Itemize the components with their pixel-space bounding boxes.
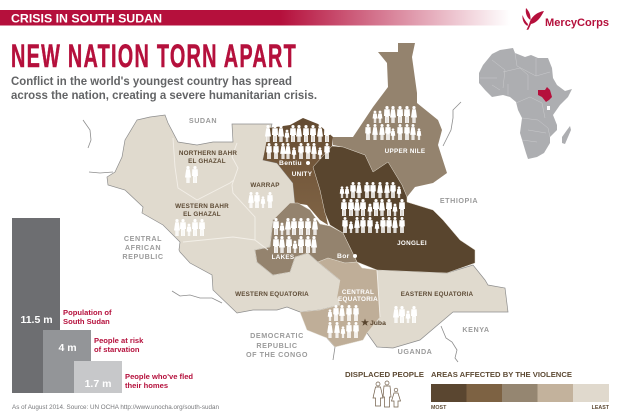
bar: 4m: 4 m [58,342,77,354]
legend: areas affected: LEAST [592,405,610,411]
city: Juba: Juba [370,320,386,327]
title: NEW NATION TORN APART [11,38,297,74]
city: Bentiu: Bentiu [279,160,302,167]
bar: 1.7m: 1.7 m [85,378,111,390]
people: Unity [265,125,330,159]
label: displaced: People who've fled [125,372,193,381]
South Sudan highlight [538,87,552,102]
locator map: Africa [479,48,572,159]
region labels: UPPER NILE [385,148,425,155]
label: starvation [94,336,144,354]
neighbouring country labels: REPUBLIC [122,252,164,261]
label: population: South Sudan [63,317,110,326]
neighbouring country labels: CENTRAL [124,234,162,243]
bar: 4m [43,330,91,393]
neighbouring country labels: OF THE CONGO [246,350,308,359]
region borders [173,138,380,317]
city: Juba [361,318,386,327]
region labels: LAKES [272,254,294,261]
region labels: EL GHAZAL [183,211,221,218]
bar: 11.5m: 11.5 m [20,314,53,326]
region labels: WARRAP [250,182,280,189]
region: Central Equatoria [300,258,380,347]
region labels: WESTERN BAHR [175,203,229,210]
region labels: NORTHERN BAHR [179,150,237,157]
neighbouring country labels: ETHIOPIA [440,196,478,205]
region labels: CENTRAL [342,289,374,296]
neighbouring country labels: KENYA [462,325,490,334]
subtitle [11,74,317,102]
people: Northern Bahr el Ghazal [185,166,198,183]
logo: Mercy Corps [522,8,609,30]
people: Warrap [248,192,273,208]
region labels: EASTERN EQUATORIA [401,291,473,298]
neighbouring country labels: REPUBLIC [256,341,298,350]
region labels: EQUATORIA [338,296,378,303]
subtitle: Conflict in the world's youngest country has spread [11,74,292,88]
people: Central Equatoria [327,305,359,338]
legend: displaced people: DISPLACED PEOPLE [345,370,424,379]
neighbouring country labels: AFRICAN [125,243,161,252]
neighbouring country labels [122,116,490,359]
map of South Sudan [107,43,508,348]
label: population: Population of [63,308,112,317]
people: Jonglei [340,182,405,233]
region: Lakes and Bor [255,203,357,275]
neighbouring country labels: DEMOCRATIC [250,331,304,340]
region: Upper Nile [333,43,447,197]
people: Lakes [273,218,318,253]
region labels: WESTERN EQUATORIA [235,291,309,298]
legend: areas affected [431,370,610,411]
region labels: EL GHAZAL [188,158,226,165]
label: starvation: People at risk [94,336,144,345]
source note: As of August 2014. Source: UN OCHA http://www.unocha.org/south-sudan [12,404,219,411]
subtitle: across the nation, creating a severe humanitarian crisis. [11,88,317,102]
region labels: JONGLEI [397,240,427,247]
label: starvation: of starvation [94,345,140,354]
people: Eastern Equatoria [393,306,417,323]
people: Upper Nile [365,106,421,140]
label: displaced [125,372,193,390]
header bar: CRISIS IN SOUTH SUDAN [11,13,162,25]
region labels: UNITY [292,171,313,178]
header bar [0,10,510,26]
region: Jonglei [313,146,475,273]
region labels [175,148,473,303]
label: population [63,308,112,326]
legend: areas affected: AREAS AFFECTED BY THE VIOLENCE [431,370,572,379]
city: Bor [337,253,357,260]
bar: 11.5m [12,218,60,393]
legend: areas affected: MOST [431,405,447,411]
region: Unity [263,118,333,225]
logo: Mercy Corps: MercyCorps [545,17,609,29]
neighbouring country labels: UGANDA [398,347,432,356]
neighbouring country labels: SUDAN [189,116,217,125]
region: Western and Northern Bahr el Ghazal, Warrap, Western and Eastern Equatoria base [107,115,508,348]
chart: stacked population squares [12,218,193,393]
people: Western Bahr el Ghazal [174,219,205,236]
city: Bor: Bor [337,253,350,260]
neighbouring borders [83,102,461,362]
bar: 1.7m [74,361,122,393]
label: displaced: their homes [125,381,168,390]
legend: displaced people [345,370,424,407]
